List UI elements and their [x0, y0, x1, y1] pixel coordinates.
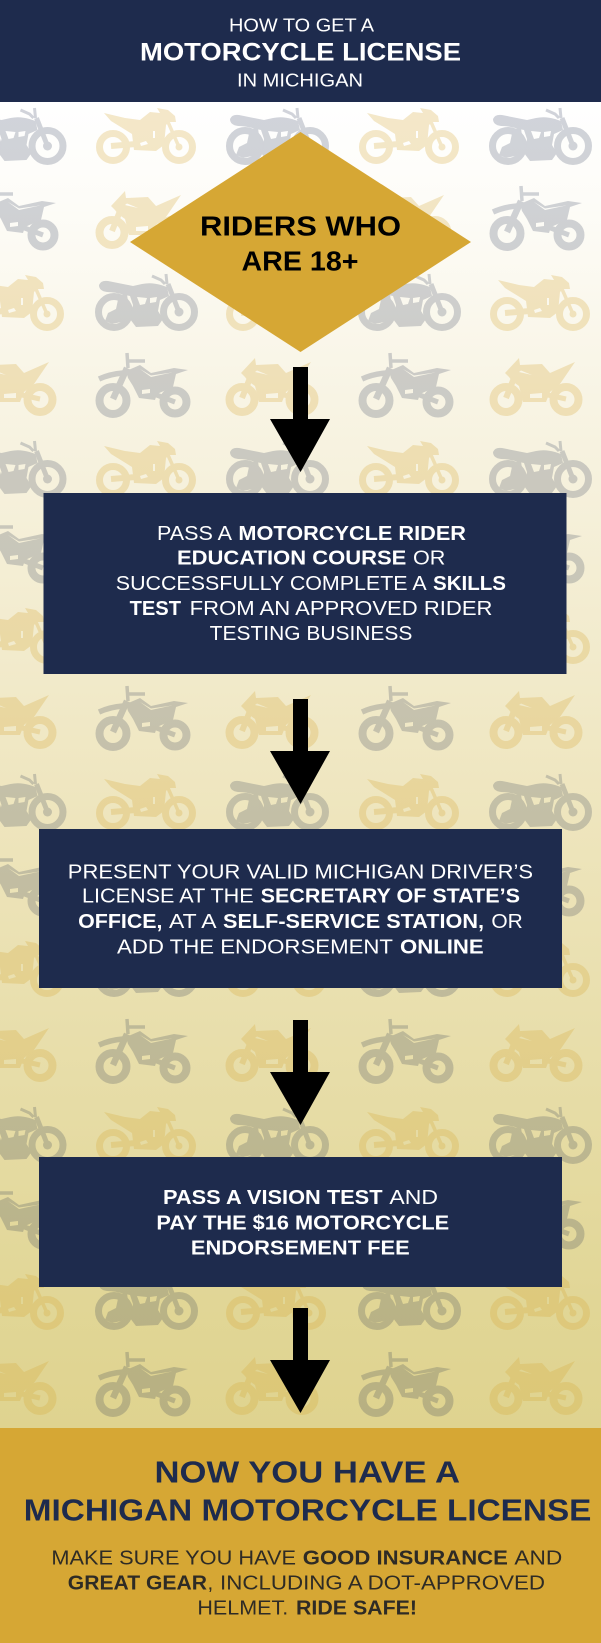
diamond: riders who are 18+: [130, 132, 471, 352]
step 2 text: AT A: [169, 911, 217, 933]
step 1 panel: [44, 493, 566, 674]
step 2 text: LICENSE AT THE: [82, 886, 254, 908]
footer text: INCLUDING A DOT-APPROVED: [220, 1571, 545, 1594]
arrow 1: [270, 367, 330, 472]
step 1 text: PASS A: [157, 523, 233, 545]
footer text: RIDE SAFE!: [296, 1597, 417, 1620]
step 1 text: SUCCESSFULLY COMPLETE A: [116, 573, 427, 595]
header background: [0, 0, 601, 102]
step 1 text: EDUCATION COURSE: [177, 548, 406, 570]
step 1 background: [44, 493, 566, 674]
footer heading: NOW YOU HAVE A: [154, 1455, 460, 1489]
footer text: ,: [208, 1571, 213, 1594]
title: MOTORCYCLE LICENSE: [140, 39, 461, 67]
step 3 text: ENDORSEMENT FEE: [191, 1238, 410, 1260]
step 1 text: MOTORCYCLE RIDER: [238, 523, 467, 545]
step 1 text: TEST: [130, 598, 181, 620]
step 1 text: TESTING BUSINESS: [210, 623, 412, 645]
title: IN MICHIGAN: [237, 70, 363, 91]
footer heading: [24, 1455, 591, 1527]
header panel: [0, 0, 601, 102]
title: HOW TO GET A: [229, 15, 375, 36]
arrow 2: [270, 699, 330, 804]
diamond text: [200, 211, 401, 277]
diamond text: RIDERS WHO: [200, 211, 401, 242]
step 2 text: ONLINE: [400, 936, 484, 958]
footer text: AND: [514, 1546, 562, 1569]
step 1 text: FROM AN APPROVED RIDER: [190, 598, 492, 620]
footer text: GREAT GEAR: [68, 1571, 207, 1594]
step 2 text: [68, 861, 533, 958]
footer panel: [0, 1428, 601, 1643]
footer background: [0, 1428, 601, 1643]
step 2 text: SECRETARY OF STATE’S: [261, 886, 520, 908]
footer text: [51, 1546, 562, 1620]
step 1 text: SKILLS: [433, 573, 506, 595]
step 2 background: [39, 829, 562, 988]
step 3 panel: [39, 1157, 562, 1287]
motorcycle icon pattern: [0, 108, 588, 1413]
step 1 text: [116, 523, 506, 645]
footer heading: MICHIGAN MOTORCYCLE LICENSE: [24, 1493, 591, 1527]
arrow 3: [270, 1020, 330, 1125]
title: [140, 15, 461, 91]
step 2 text: OR: [491, 911, 523, 933]
step 2 panel: [39, 829, 562, 988]
diamond text: ARE 18+: [242, 246, 358, 277]
step 3 text: PAY THE $16 MOTORCYCLE: [156, 1212, 449, 1234]
diamond shape: [130, 132, 471, 352]
step 3 text: AND: [389, 1187, 438, 1209]
step 3 text: [156, 1187, 449, 1260]
step 2 text: OFFICE,: [78, 911, 162, 933]
step 1 text: OR: [413, 548, 445, 570]
step 2 text: SELF-SERVICE STATION,: [223, 911, 484, 933]
footer text: MAKE SURE YOU HAVE: [51, 1546, 296, 1569]
step 3 text: PASS A VISION TEST: [163, 1187, 382, 1209]
footer text: HELMET.: [197, 1597, 288, 1620]
step 2 text: PRESENT YOUR VALID MICHIGAN DRIVER’S: [68, 861, 533, 883]
step 3 background: [39, 1157, 562, 1287]
footer text: GOOD INSURANCE: [303, 1546, 508, 1569]
step 2 text: ADD THE ENDORSEMENT: [117, 936, 393, 958]
arrow 4: [270, 1308, 330, 1413]
